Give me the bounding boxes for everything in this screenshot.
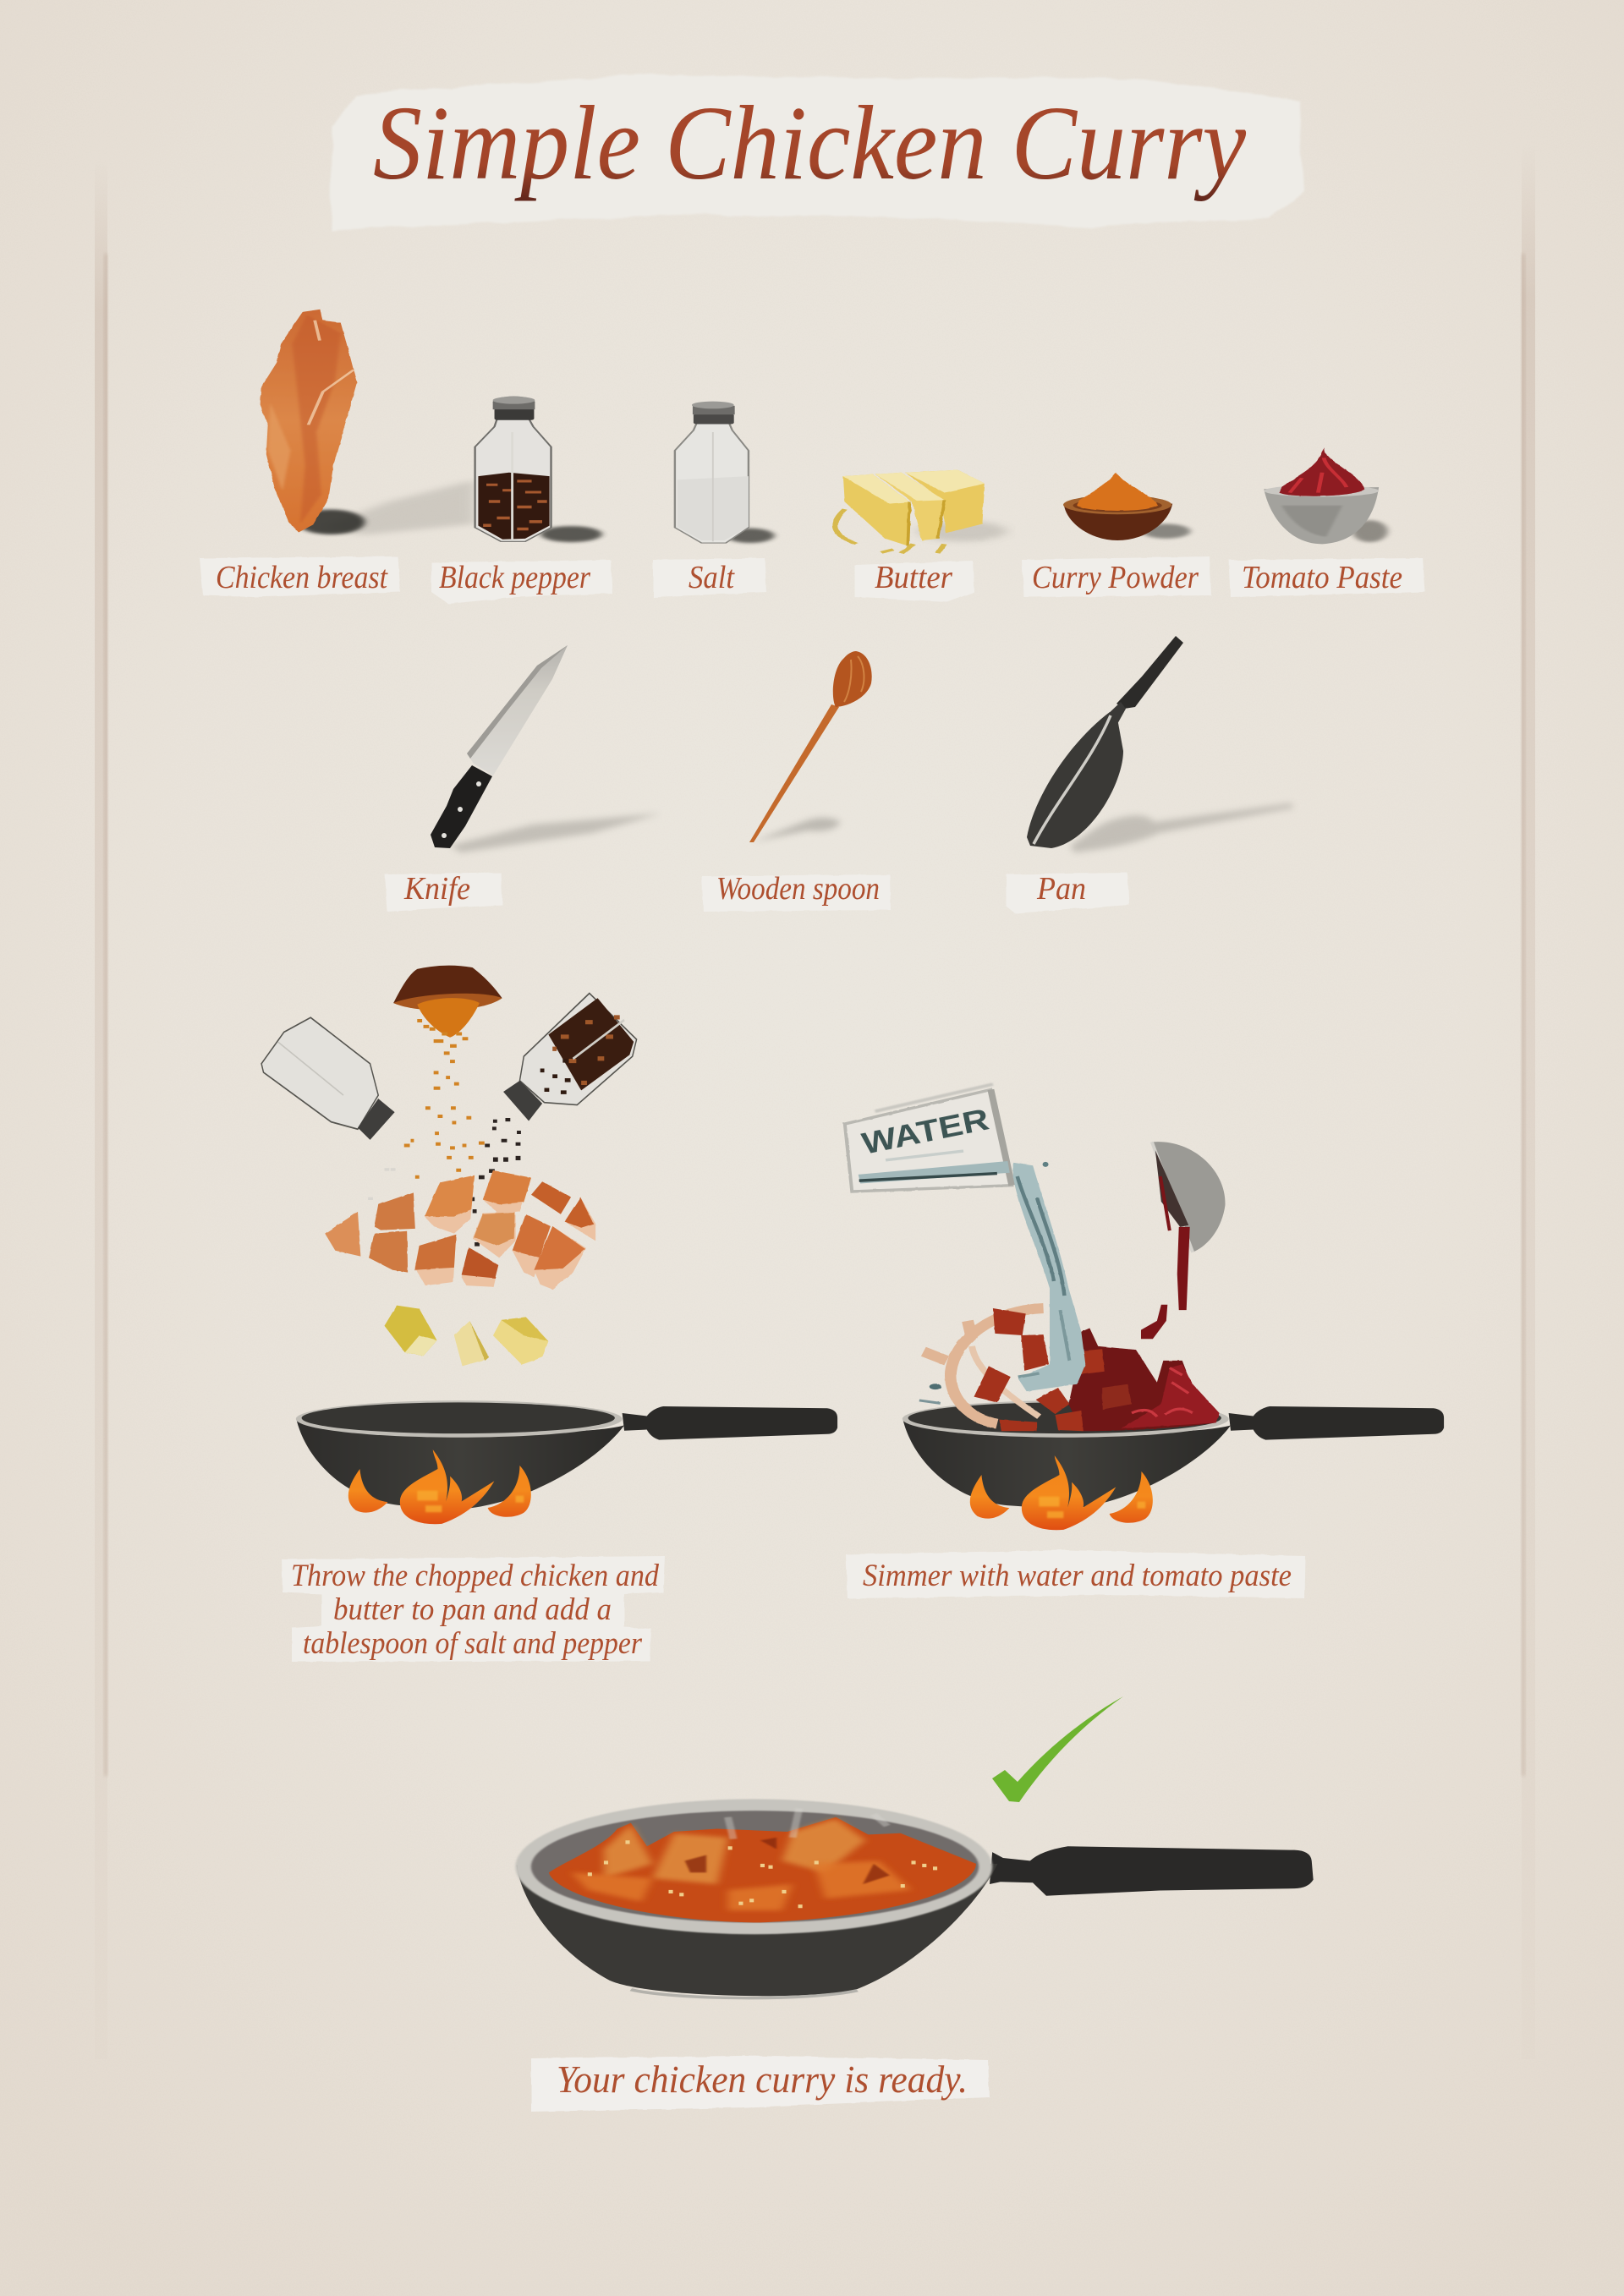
panel: finished dish [515, 1696, 1314, 2112]
pan rim [515, 1799, 992, 1934]
pan handle [990, 1846, 1314, 1896]
caption: step two: Simmer with water and tomato paste [863, 1559, 1292, 1593]
icon: check mark [992, 1696, 1123, 1802]
icon: chicken breast [260, 310, 475, 534]
panel: step one [261, 966, 837, 1662]
icon: finished pan [515, 1799, 1314, 1998]
label: Knife: Knife [403, 871, 470, 907]
label: Black pepper: Black pepper [439, 560, 590, 595]
wok body [296, 1419, 624, 1510]
icon: salt shaker [675, 402, 775, 543]
caption: finished: Your chicken curry is ready. [557, 2058, 968, 2101]
panel: ingredients [200, 310, 1425, 604]
caption: step one: tablespoon of salt and pepper [303, 1626, 643, 1661]
caption: step one: Throw the chopped chicken and [291, 1559, 659, 1593]
icon: pan upright [1027, 636, 1294, 852]
icon: tilted salt shaker [261, 1017, 395, 1140]
label: Tomato Paste: Tomato Paste [1242, 560, 1402, 595]
seasoning specks [368, 1019, 521, 1253]
pan body [517, 1864, 998, 1996]
title text: Simple Chicken Curry [373, 85, 1246, 202]
cup lettering: WATER [859, 1101, 992, 1161]
caption: step one [282, 1556, 665, 1662]
title [331, 74, 1303, 230]
icon: tomato paste pile [1068, 1328, 1219, 1431]
icon: black pepper shaker [475, 397, 602, 542]
icon: tilted pepper shaker [503, 994, 637, 1121]
label: Butter [854, 560, 974, 602]
icon: knife [431, 645, 661, 852]
icon: water stream [919, 1162, 1085, 1403]
caption: step two [846, 1550, 1305, 1598]
wok handle [623, 1406, 837, 1440]
panel: step two [845, 1084, 1444, 1598]
panel: tools [385, 636, 1294, 913]
label: Knife [385, 871, 502, 912]
title patch [331, 74, 1303, 230]
label: Wooden spoon: Wooden spoon [716, 871, 880, 907]
icon: inverted curry bowl [393, 966, 502, 1038]
icon: sauce ladle [1141, 1142, 1225, 1339]
icon: chopped chicken [325, 1170, 595, 1290]
icon: wooden spoon [749, 651, 872, 842]
icon: tomato paste bowl [1264, 447, 1388, 544]
label: Butter: Butter [875, 560, 952, 595]
icon: butter [835, 470, 1007, 553]
flames [970, 1455, 1153, 1530]
label: Pan [1007, 871, 1129, 913]
flames [348, 1449, 531, 1524]
label: Curry Powder: Curry Powder [1032, 560, 1199, 595]
label: Salt: Salt [689, 560, 735, 595]
icon: butter cubes [384, 1306, 548, 1366]
icon: curry powder bowl [1063, 473, 1190, 540]
caption: step one: butter to pan and add a [333, 1592, 612, 1627]
label: Chicken breast: Chicken breast [216, 560, 388, 595]
label: Pan: Pan [1036, 871, 1086, 907]
icon: simmering chicken and swirl [924, 1308, 1132, 1431]
icon: wok with flames [296, 1400, 837, 1524]
icon: wok [903, 1400, 1444, 1510]
label: Salt [653, 558, 766, 597]
icon: water cup [845, 1084, 1012, 1192]
curry [549, 1817, 976, 1922]
